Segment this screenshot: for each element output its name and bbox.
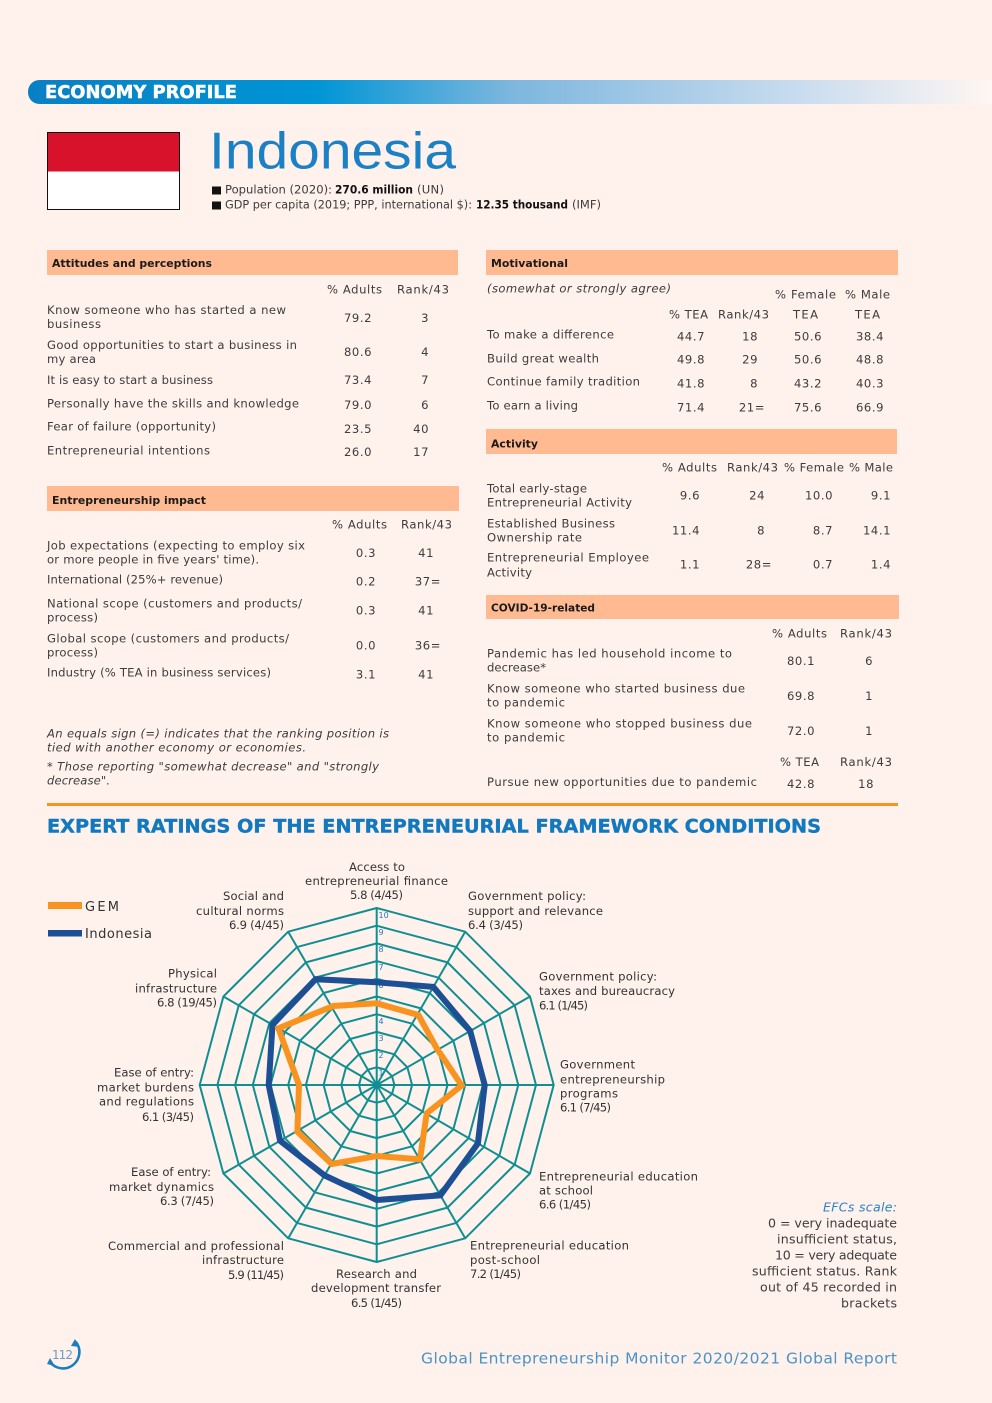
panel: motivational: Build great wealth bbox=[487, 352, 599, 366]
panel: motivational: 66.9 bbox=[856, 401, 884, 415]
panel: activity: Activity bbox=[487, 566, 532, 580]
panel: attitudes and perceptions: Entrepreneurial intentions bbox=[47, 444, 210, 458]
panel: COVID-19-related: 72.0 bbox=[787, 724, 815, 738]
radar label: physical infrastructure: infrastructure bbox=[135, 982, 217, 996]
radar scale numbers: 4 bbox=[378, 1017, 384, 1026]
panel: activity: 8 bbox=[757, 524, 765, 538]
notes: tied with another economy or economies. bbox=[47, 741, 306, 755]
panel: attitudes and perceptions: 4 bbox=[421, 345, 429, 359]
panel: motivational: 71.4 bbox=[677, 401, 705, 415]
panel: attitudes and perceptions: business bbox=[47, 317, 101, 331]
panel: attitudes and perceptions: 79.0 bbox=[344, 398, 372, 412]
panel: entrepreneurship impact: 41 bbox=[418, 668, 434, 682]
panel: motivational: % Male bbox=[845, 288, 890, 302]
radar label: commercial infrastructure bbox=[108, 1239, 284, 1282]
panel: activity: 24 bbox=[749, 489, 765, 503]
panel: activity: 9.6 bbox=[680, 489, 700, 503]
panel: COVID-19-related: 18 bbox=[858, 777, 874, 791]
key facts: 270.6 million bbox=[335, 183, 413, 197]
panel: COVID-19-related: % TEA bbox=[780, 755, 819, 769]
radar label: social norms: cultural norms bbox=[196, 904, 284, 918]
panel: motivational: 50.6 bbox=[794, 330, 822, 344]
radar label: government programs: 6.1 (7/45) bbox=[560, 1101, 611, 1115]
panel: motivational: (somewhat or strongly agree) bbox=[487, 282, 671, 296]
legend bbox=[48, 900, 152, 942]
panel: motivational: TEA bbox=[792, 308, 818, 322]
panel: activity: Total early-stage bbox=[486, 482, 587, 496]
panel: motivational: 29 bbox=[742, 353, 758, 367]
panel: COVID-19-related: Know someone who stopped business due bbox=[487, 717, 752, 731]
key facts bbox=[212, 183, 601, 212]
panel: motivational: 44.7 bbox=[677, 330, 705, 344]
panel: COVID-19-related: 6 bbox=[865, 654, 873, 668]
panel: attitudes and perceptions: 3 bbox=[421, 311, 429, 325]
radar label: access to finance: Access to bbox=[349, 860, 405, 874]
radar label: government programs: entrepreneurship bbox=[560, 1073, 665, 1087]
panel: entrepreneurship impact: process) bbox=[47, 611, 98, 625]
panel: attitudes and perceptions: Personally have the skills and knowledge bbox=[47, 397, 299, 411]
panel: motivational: 18 bbox=[742, 330, 758, 344]
radar label: government programs: programs bbox=[560, 1087, 618, 1101]
radar label: research and development: development transfer bbox=[311, 1281, 441, 1295]
note: EFCs scale: EFCs scale: bbox=[823, 1199, 897, 1214]
panel: entrepreneurship impact: % Adults bbox=[332, 518, 387, 532]
radar scale numbers: 10 bbox=[378, 911, 389, 920]
title: Indonesia: Indonesia bbox=[209, 122, 456, 180]
radar label: social norms bbox=[196, 889, 284, 932]
panel: activity: 10.0 bbox=[805, 489, 833, 503]
panel: motivational: Rank/43 bbox=[718, 308, 769, 322]
notes: decrease". bbox=[47, 774, 110, 788]
panel: motivational: 75.6 bbox=[794, 401, 822, 415]
radar label: market dynamics: market dynamics bbox=[109, 1180, 214, 1194]
panel: entrepreneurship impact: 41 bbox=[418, 546, 434, 560]
note: EFCs scale: 0 = very inadequate bbox=[768, 1215, 897, 1230]
panel: activity bbox=[486, 429, 897, 580]
panel: activity: Ownership rate bbox=[487, 531, 582, 545]
notes: * Those reporting "somewhat decrease" and "strongly bbox=[47, 760, 379, 774]
key facts: GDP per capita (2019; PPP, international $): bbox=[225, 198, 472, 212]
radar label: commercial infrastructure: Commercial and professional bbox=[108, 1239, 284, 1253]
panel: entrepreneurship impact: Rank/43 bbox=[401, 518, 452, 532]
panel: entrepreneurship impact: International (25%+ revenue) bbox=[47, 573, 223, 587]
panel: attitudes and perceptions: It is easy to start a business bbox=[47, 373, 213, 387]
page number with arc icon bbox=[47, 1339, 80, 1368]
radar label: commercial infrastructure: infrastructure bbox=[202, 1253, 284, 1267]
data line: Indonesia bbox=[269, 979, 485, 1200]
page number with arc icon: 112 bbox=[52, 1348, 73, 1362]
panel: motivational: % TEA bbox=[669, 308, 708, 322]
panel: motivational: To make a difference bbox=[486, 328, 614, 342]
panel: COVID-19-related: Rank/43 bbox=[840, 627, 892, 641]
panel: attitudes and perceptions: 7 bbox=[421, 373, 429, 387]
panel: COVID-19-related: 80.1 bbox=[787, 654, 815, 668]
radar label: research and development: 6.5 (1/45) bbox=[351, 1296, 402, 1310]
panel: motivational: 8 bbox=[750, 377, 758, 391]
panel: COVID-19-related: 69.8 bbox=[787, 689, 815, 703]
panel: entrepreneurship impact: 0.3 bbox=[356, 604, 376, 618]
radar label: education post-school: post-school bbox=[470, 1253, 540, 1267]
radar label: market dynamics bbox=[109, 1165, 214, 1208]
panel: attitudes and perceptions bbox=[47, 250, 458, 459]
panel: entrepreneurship impact bbox=[46, 486, 459, 682]
note: EFCs scale: insufficient status, bbox=[777, 1231, 897, 1246]
panel: COVID-19-related: 42.8 bbox=[787, 777, 815, 791]
panel: motivational: 50.6 bbox=[794, 353, 822, 367]
panel: COVID-19-related: Know someone who started business due bbox=[487, 682, 745, 696]
panel: activity: 8.7 bbox=[813, 524, 833, 538]
footer: report title: Global Entrepreneurship Monitor 2020/2021 Global Report bbox=[421, 1349, 897, 1367]
radar label: education at school: Entrepreneurial education bbox=[539, 1170, 698, 1184]
panel: activity: 28= bbox=[746, 558, 772, 572]
key facts: 12.35 thousand bbox=[476, 198, 568, 212]
panel: motivational: 49.8 bbox=[677, 353, 705, 367]
radar scale numbers: 1 bbox=[378, 1069, 384, 1078]
panel: entrepreneurship impact: Entrepreneurship impact bbox=[52, 494, 206, 507]
radar label: access to finance: entrepreneurial finance bbox=[305, 874, 448, 888]
radar label: education at school: at school bbox=[539, 1184, 593, 1198]
radar label: access to finance: 5.8 (4/45) bbox=[350, 888, 403, 902]
panel: COVID-19-related: 1 bbox=[865, 724, 873, 738]
panel: attitudes and perceptions: my area bbox=[47, 352, 96, 366]
radar label: education post-school: 7.2 (1/45) bbox=[470, 1267, 521, 1281]
note: EFCs scale: 10 = very adequate bbox=[775, 1247, 897, 1262]
radar label: commercial infrastructure: 5.9 (11/45) bbox=[228, 1268, 284, 1282]
panel: motivational: Continue family tradition bbox=[487, 375, 640, 389]
radar label: research and development: Research and bbox=[336, 1267, 417, 1281]
panel: COVID-19-related: to pandemic bbox=[487, 731, 565, 745]
radar label: access to finance bbox=[305, 860, 448, 902]
data line: GEM bbox=[278, 1003, 462, 1164]
panel: attitudes and perceptions: 73.4 bbox=[344, 373, 372, 387]
panel: attitudes and perceptions: Rank/43 bbox=[397, 283, 449, 297]
panel: motivational: 40.3 bbox=[856, 377, 884, 391]
header band: economy profile: ECONOMY PROFILE bbox=[45, 83, 237, 103]
note: EFCs scale: out of 45 recorded in bbox=[760, 1279, 897, 1294]
panel: activity: Entrepreneurial Employee bbox=[487, 551, 649, 565]
panel: attitudes and perceptions: 17 bbox=[413, 445, 429, 459]
panel: entrepreneurship impact: 36= bbox=[415, 639, 441, 653]
radar scale numbers: 7 bbox=[378, 963, 384, 972]
legend: Indonesia bbox=[85, 927, 152, 942]
panel: entrepreneurship impact: Global scope (customers and products/ bbox=[47, 631, 289, 645]
panel: COVID-19-related: to pandemic bbox=[487, 696, 565, 710]
panel: attitudes and perceptions: Attitudes and perceptions bbox=[52, 257, 212, 270]
panel: attitudes and perceptions: % Adults bbox=[327, 283, 382, 297]
radar label: social norms: 6.9 (4/45) bbox=[229, 918, 284, 932]
panel: activity: % Female bbox=[784, 461, 844, 475]
panel: attitudes and perceptions: 80.6 bbox=[344, 345, 372, 359]
panel: COVID-19-related: Pursue new opportunities due to pandemic bbox=[487, 775, 757, 789]
radar label: market burdens: and regulations bbox=[99, 1095, 194, 1109]
radar label: market burdens bbox=[97, 1066, 194, 1124]
radar scale numbers: 6 bbox=[378, 981, 384, 990]
radar label: market burdens: Ease of entry: bbox=[114, 1066, 194, 1080]
panel: motivational: 48.8 bbox=[856, 353, 884, 367]
notes: An equals sign (=) indicates that the ranking position is bbox=[46, 727, 389, 741]
panel: attitudes and perceptions: 6 bbox=[421, 398, 429, 412]
radar label: government taxes: 6.1 (1/45) bbox=[539, 999, 588, 1013]
radar label: education at school bbox=[539, 1170, 698, 1212]
panel: activity: 1.4 bbox=[871, 558, 891, 572]
radar label: education post-school: Entrepreneurial education bbox=[470, 1239, 629, 1253]
panel: attitudes and perceptions: Fear of failure (opportunity) bbox=[47, 420, 216, 434]
panel: entrepreneurship impact: 3.1 bbox=[356, 668, 376, 682]
radar label: government taxes bbox=[539, 970, 675, 1013]
panel: attitudes and perceptions: Know someone who has started a new bbox=[47, 303, 286, 317]
panel: entrepreneurship impact: 0.2 bbox=[356, 575, 376, 589]
panel: attitudes and perceptions: 40 bbox=[413, 422, 429, 436]
panel: activity: % Male bbox=[849, 461, 893, 475]
radar scale numbers: 5 bbox=[378, 999, 384, 1008]
panel: COVID-19-related: COVID-19-related bbox=[491, 602, 595, 615]
radar label: government programs bbox=[560, 1058, 665, 1115]
radar label: government support: support and relevance bbox=[468, 904, 603, 918]
panel: COVID-19-related: Pandemic has led household income to bbox=[487, 647, 732, 661]
radar label: physical infrastructure: Physical bbox=[168, 967, 217, 981]
panel: COVID-19-related bbox=[486, 595, 899, 791]
panel: motivational: 38.4 bbox=[856, 330, 884, 344]
panel: COVID-19-related: 1 bbox=[865, 689, 873, 703]
panel: activity: Activity bbox=[491, 438, 538, 450]
radar scale numbers bbox=[378, 911, 389, 1078]
panel: entrepreneurship impact: 0.3 bbox=[356, 546, 376, 560]
radar scale numbers: 2 bbox=[378, 1051, 384, 1060]
panel: entrepreneurship impact: 37= bbox=[415, 575, 441, 589]
radar scale numbers: 9 bbox=[378, 928, 384, 937]
key facts: (UN) bbox=[417, 183, 444, 197]
radar label: government taxes: Government policy: bbox=[539, 970, 657, 984]
panel: activity: Rank/43 bbox=[727, 461, 778, 475]
radar label: market burdens: 6.1 (3/45) bbox=[142, 1110, 194, 1124]
note: EFCs scale bbox=[752, 1199, 898, 1310]
radar label: research and development bbox=[311, 1267, 441, 1310]
radar label: education at school: 6.6 (1/45) bbox=[539, 1198, 591, 1212]
legend: GEM bbox=[85, 900, 119, 915]
radar label: market dynamics: 6.3 (7/45) bbox=[160, 1194, 214, 1208]
panel: attitudes and perceptions: Good opportunities to start a business in bbox=[47, 338, 297, 352]
panel: activity: 9.1 bbox=[871, 489, 891, 503]
panel: activity: Entrepreneurial Activity bbox=[487, 496, 632, 510]
panel: COVID-19-related: % Adults bbox=[772, 627, 827, 641]
panel: motivational: Motivational bbox=[491, 257, 568, 270]
radar label: market dynamics: Ease of entry: bbox=[131, 1165, 211, 1179]
panel: motivational: 41.8 bbox=[677, 377, 705, 391]
radar label: government support: Government policy: bbox=[468, 889, 586, 903]
panel: activity: 14.1 bbox=[863, 524, 891, 538]
panel: motivational: To earn a living bbox=[486, 399, 578, 413]
panel: activity: Established Business bbox=[487, 516, 615, 530]
radar label: government taxes: taxes and bureaucracy bbox=[539, 984, 675, 998]
key facts: Population (2020): bbox=[225, 183, 332, 197]
radar chart bbox=[200, 908, 554, 1262]
notes bbox=[46, 727, 389, 788]
radar label: government programs: Government bbox=[560, 1058, 635, 1072]
radar label: social norms: Social and bbox=[223, 889, 284, 903]
radar scale numbers: 8 bbox=[378, 945, 384, 954]
note: EFCs scale: sufficient status. Rank bbox=[752, 1263, 898, 1278]
heading: expert ratings: EXPERT RATINGS OF THE ENTREPRENEURIAL FRAMEWORK CONDITIONS bbox=[47, 816, 821, 837]
radar label: education post-school bbox=[470, 1239, 629, 1281]
key facts: (IMF) bbox=[572, 198, 601, 212]
panel: motivational: 21= bbox=[739, 401, 765, 415]
panel: COVID-19-related: decrease* bbox=[487, 661, 546, 675]
radar label: government support bbox=[468, 889, 603, 932]
radar label: physical infrastructure bbox=[135, 967, 217, 1010]
panel: activity: 0.7 bbox=[813, 558, 833, 572]
panel: motivational: 43.2 bbox=[794, 377, 822, 391]
panel: activity: 1.1 bbox=[680, 558, 700, 572]
radar scale numbers: 3 bbox=[378, 1034, 384, 1043]
panel: activity: % Adults bbox=[662, 461, 717, 475]
panel: attitudes and perceptions: 26.0 bbox=[344, 445, 372, 459]
radar grid bbox=[200, 908, 554, 1262]
panel: motivational bbox=[486, 250, 898, 415]
panel: entrepreneurship impact: Job expectations (expecting to employ six bbox=[46, 539, 305, 553]
panel: attitudes and perceptions: 79.2 bbox=[344, 311, 372, 325]
panel: motivational: TEA bbox=[854, 308, 880, 322]
radar label: market burdens: market burdens bbox=[97, 1081, 194, 1095]
panel: motivational: % Female bbox=[775, 288, 836, 302]
icon: flag of Indonesia bbox=[48, 132, 180, 210]
panel: attitudes and perceptions: 23.5 bbox=[344, 422, 372, 436]
panel: COVID-19-related: Rank/43 bbox=[840, 755, 892, 769]
panel: entrepreneurship impact: 0.0 bbox=[356, 639, 376, 653]
radar label: physical infrastructure: 6.8 (19/45) bbox=[157, 996, 217, 1010]
panel: activity: 11.4 bbox=[672, 524, 700, 538]
header band: economy profile bbox=[28, 80, 992, 104]
panel: entrepreneurship impact: 41 bbox=[418, 604, 434, 618]
panel: entrepreneurship impact: or more people in five years' time). bbox=[47, 553, 259, 567]
radar label: government support: 6.4 (3/45) bbox=[468, 918, 523, 932]
note: EFCs scale: brackets bbox=[841, 1295, 897, 1310]
panel: entrepreneurship impact: process) bbox=[47, 646, 98, 660]
panel: entrepreneurship impact: Industry (% TEA in business services) bbox=[47, 666, 271, 680]
panel: entrepreneurship impact: National scope (customers and products/ bbox=[47, 597, 302, 611]
